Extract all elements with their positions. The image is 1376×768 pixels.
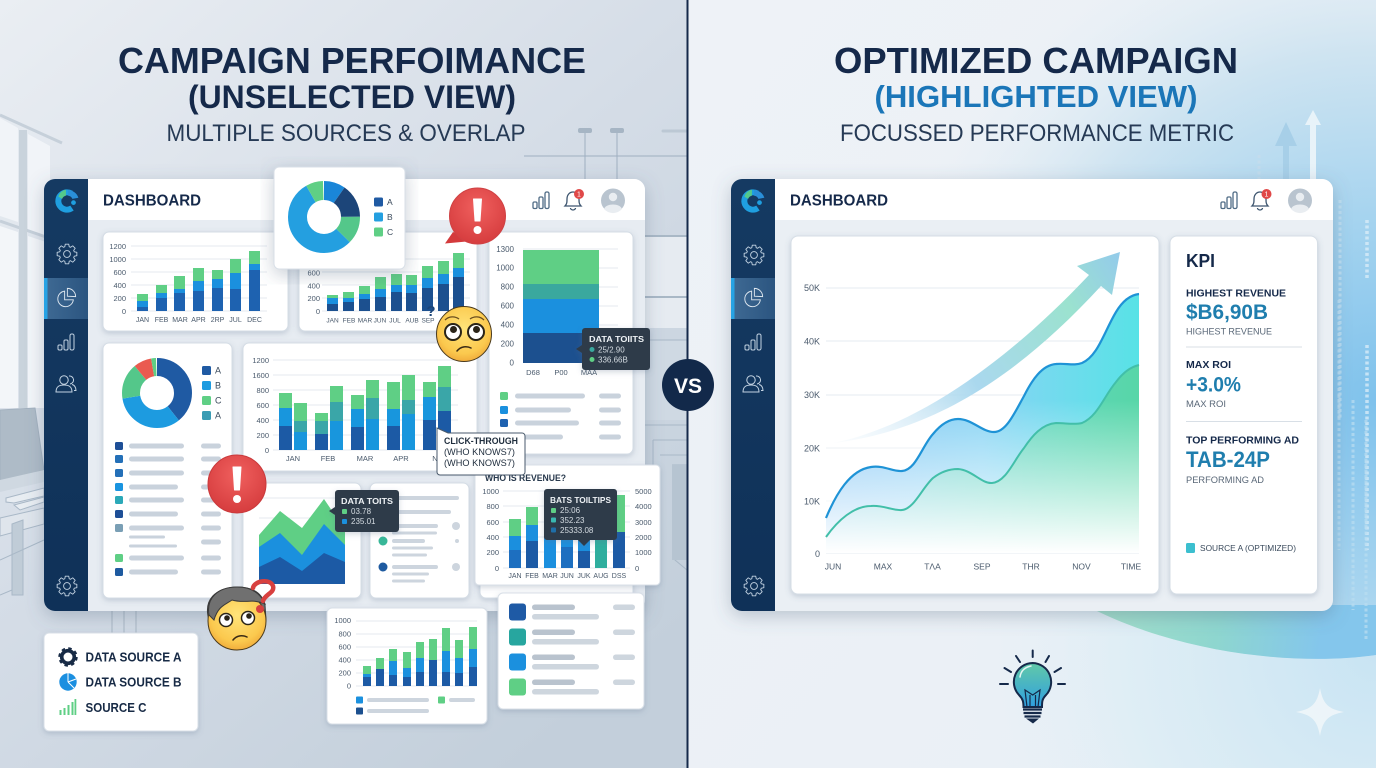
icon: upward arrows background [1275,110,1321,180]
legend labels: DATA SOURCE B [86,674,182,690]
panel: large grouped bar chart: 0 [265,446,269,455]
panel: donut chart with list: C [215,396,222,406]
right background wash [800,0,1376,768]
right header icons [1221,188,1312,213]
x axis labels: SEP [973,562,991,572]
tooltip: data toits: 03.78 [351,507,372,516]
panel: stacked bar chart 3: 200 [501,340,515,348]
right header bar [775,179,1333,220]
panel: bar chart 1: JUL [229,317,242,324]
tooltip: click-through callout: (WHO KNOWS7) [444,458,515,468]
icon: alert speech bubble [445,188,506,244]
panel: left dashboard [44,179,650,611]
legend: data sources [44,633,198,731]
left background panel [0,0,687,768]
panel: large grouped bar chart: 400 [256,416,269,425]
x axis labels [825,562,1141,572]
panel: revenue bar chart: 1000 [635,548,652,557]
panel: large grouped bar chart: MAR [357,454,374,463]
growth arrow [833,252,1120,443]
panel: bar chart 1: JAN [136,317,149,324]
panel: pie card: A [387,197,393,207]
right sidebar [731,179,775,611]
panel: small area chart [243,483,361,598]
y axis labels: 20K [804,444,820,454]
panel: bar chart 1: 1200 [109,242,126,251]
KPI: max ROI: MAX ROI [1186,399,1226,410]
panel: bar chart 1: 1000 [109,255,126,264]
panel: lower bar chart: 400 [338,656,351,664]
panel: revenue bar chart: 2000 [635,533,652,542]
legend labels [86,650,182,715]
tooltip: data toiits: 25/2.90 [598,346,625,354]
panel: revenue bar chart: 400 [486,533,499,542]
panel: revenue bar chart: 1000 [482,487,499,496]
panel: bar chart 2: 400 [307,282,320,290]
VS badge: VS [674,375,702,398]
right title: FOCUSSED PERFORMANCE METRIC [840,120,1234,147]
panel: growth area chart [791,236,1159,594]
right title: (HIGHLIGHTED VIEW) [874,79,1198,114]
panel: large grouped bar chart: 800 [256,386,269,395]
tooltip: data tooltips: 25333.08 [560,526,594,535]
panel: bar chart 2: 200 [307,294,320,303]
panel: list [370,483,469,598]
panel: large grouped bar chart: 200 [256,431,269,440]
panel: stacked bar chart 3: MAA [581,368,597,377]
right title: OPTIMIZED CAMPAIGN [834,40,1238,81]
left title: CAMPAIGN PERFOIMANCE [118,40,586,81]
legend labels: DATA SOURCE A [86,650,182,664]
panel: large grouped bar chart: N [432,454,438,463]
panel: large grouped bar chart [243,343,477,471]
tooltip: click-through callout: (WHO KNOWS7) [444,447,515,457]
divider [686,0,688,768]
icon: gear [59,648,77,666]
panel: revenue bar chart: 0 [635,564,639,573]
panel: donut chart with list: B [215,380,221,390]
icon: light bulb [1000,650,1065,724]
panel: revenue bar chart: 600 [486,518,499,527]
panel: revenue bar chart: AUG [593,573,609,580]
panel: stacked bar chart 3: 400 [501,320,515,330]
left header icons [533,188,625,213]
panel: bar chart 1: 200 [113,294,126,303]
panel: large grouped bar chart: 1600 [252,371,269,380]
left sidebar [44,179,88,611]
KPI: highest revenue: HIGHEST REVENUE [1186,326,1272,338]
panel: bar chart 1: 600 [113,268,126,277]
y axis labels: 0 [815,549,820,559]
tooltip: data toiits: DATA TOIITS [589,334,644,344]
icon: signal bars [60,699,76,715]
right title [834,40,1238,147]
panel: revenue bar chart: DSS [612,573,627,580]
tooltip: data toiits [576,328,650,370]
panel: bar chart 2: JUL [389,318,401,324]
x axis labels: TIME [1121,562,1141,572]
panel: stacked bar chart 3 [489,232,633,454]
KPI: max ROI: +3.0% [1186,374,1241,396]
KPI: highest revenue [1186,288,1286,338]
top donut chart [298,190,350,244]
panel: lower bar chart [327,608,487,724]
panel: stacked bar chart 3: 0 [510,358,515,368]
panel: large grouped bar chart: APR [393,454,409,463]
y axis labels: 50K [804,283,820,293]
x axis labels: MAX [874,562,893,572]
panel: stacked bar chart 3: 600 [501,302,515,310]
left header bar [88,179,645,220]
right background panel [688,0,1376,768]
panel: revenue bar chart: 800 [486,502,499,511]
VS badge [662,359,714,411]
KPI: top performing ad [1186,434,1299,486]
panel: large grouped bar chart: JAN [286,454,300,463]
panel: bar chart 2: FEB [343,318,355,324]
panel behind revenue chart [480,500,633,598]
panel: large grouped bar chart: 600 [256,401,269,410]
office sketch background [0,115,687,640]
panel: stacked bar chart 3: D68 [526,368,540,377]
tooltip: data tooltips [544,489,617,546]
panel: donut chart with list: A [215,366,221,376]
KPI: top performing ad: TAB-24P [1186,447,1270,472]
panel: revenue bar chart: JUK [577,573,591,580]
panel: bar chart 2: MAR [358,318,373,324]
panel: bar chart 2: AUB [405,318,419,324]
panel: lower bar chart: 0 [347,682,351,690]
panel: stacked bar chart 3: 800 [501,282,515,292]
tooltip: data toits: 235.01 [351,517,376,526]
x axis labels: TΛA [924,562,941,572]
panel: revenue bar chart: FEB [525,573,539,580]
tooltip: data toits: DATA TOITS [341,496,393,506]
tooltip: data tooltips: BATS TOILTIPS [550,495,611,505]
panel: pie card: C [387,227,393,237]
panel: bar chart 1: FEB [155,317,169,324]
y axis labels: 10K [804,496,820,506]
panel: lower bar chart: 600 [338,642,351,652]
panel: stacked bar chart 3: 1300 [496,245,515,254]
panel: stacked bar chart 3: P00 [554,368,568,377]
panel: bar chart 1: DEC [247,317,262,324]
panel: bar chart 2: JAN [326,318,339,324]
panel: KPI: KPI [1186,250,1215,271]
KPI: top performing ad: TOP PERFORMING AD [1186,434,1299,446]
panel: revenue bar chart: 4000 [635,502,652,511]
panel: revenue bar chart: 0 [495,564,499,573]
panel: large grouped bar chart: FEB [321,454,335,463]
tooltip: click-through callout: CLICK-THROUGH [444,436,518,446]
x axis labels: NOV [1072,562,1091,572]
panel: revenue bar chart: MAR [542,573,558,580]
panel: right dashboard [731,179,1333,611]
x axis labels: JUN [825,562,841,572]
y axis labels [804,283,820,559]
KPI: top performing ad: PERFORMING AD [1186,475,1264,486]
y axis labels: 30K [804,390,820,400]
legend: source A: SOURCE A (OPTIMIZED) [1200,543,1296,553]
panel: bar chart 2: JUN [374,318,387,324]
panel: bar chart 1: 0 [122,307,126,316]
panel: bar chart 1 [103,232,288,331]
panel: bar chart 2: 600 [307,268,320,278]
panel: donut chart with list [103,343,232,598]
right heading: dashboard: DASHBOARD [790,192,888,210]
panel: revenue bar chart: JAN [508,573,522,580]
panel: bar chart 2: SEP [421,318,435,324]
panel: KPI [1170,236,1318,594]
legend labels: SOURCE C [86,700,147,715]
tooltip: data toiits: 336.66B [598,356,628,364]
icon: confused emoji: ? [426,303,436,320]
panel: revenue bar chart: 5000 [635,487,652,496]
panel: bar chart 1: MAR [172,317,188,324]
icon: pie source b [59,673,77,691]
KPI: highest revenue: $B6,90B [1186,301,1268,324]
left title: MULTIPLE SOURCES & OVERLAP [166,120,526,147]
icon: thinking face emoji [207,581,273,650]
panel: pie card: B [387,212,393,222]
panel: revenue bar chart: 3000 [635,518,652,527]
panel: revenue bar chart: 200 [486,548,499,557]
tooltip: data tooltips: 352.23 [560,516,585,525]
panel: bar chart 2: 0 [316,307,320,316]
panel: lower bar chart: 1000 [334,616,351,625]
left heading: dashboard: DASHBOARD [103,192,201,210]
panel: revenue bar chart: WHO IS REVENUE? [485,473,566,484]
tooltip: click-through callout [437,428,525,475]
left header icons: 1 [577,192,581,198]
panel: bar chart 1: 2RP [211,317,225,324]
left title: (UNSELECTED VIEW) [188,79,516,115]
panel: revenue bar chart: JUN [560,573,574,580]
donut chart [131,367,183,419]
panel: bar chart 1: 400 [113,281,126,290]
left title [118,40,586,147]
panel: revenue bar chart [475,465,660,585]
KPI: highest revenue: HIGHEST REVENUE [1186,288,1286,300]
KPI: max ROI [1186,359,1241,410]
panel: bar chart 2 [299,232,477,331]
icon: confused emoji [426,303,492,362]
KPI: max ROI: MAX ROI [1186,359,1231,371]
panel: swatch list card [498,593,644,709]
tooltip: data tooltips: 25:06 [560,506,581,515]
icon: sparkle star [1296,688,1344,736]
tooltip: data toits [329,490,399,532]
right header icons: 1 [1265,192,1269,198]
y axis labels: 40K [804,336,820,346]
series areas [826,294,1139,553]
panel: bar chart 1: APR [191,317,206,324]
x axis labels: THR [1022,562,1040,572]
panel: stacked bar chart 3: 1000 [496,264,515,272]
panel: donut chart with list: A [215,410,221,420]
panel: lower bar chart: 200 [338,668,351,678]
panel: pie card [274,167,405,269]
panel: lower bar chart: 800 [338,630,351,638]
panel: large grouped bar chart: 1200 [252,356,269,365]
icon: alert circle [208,455,266,513]
